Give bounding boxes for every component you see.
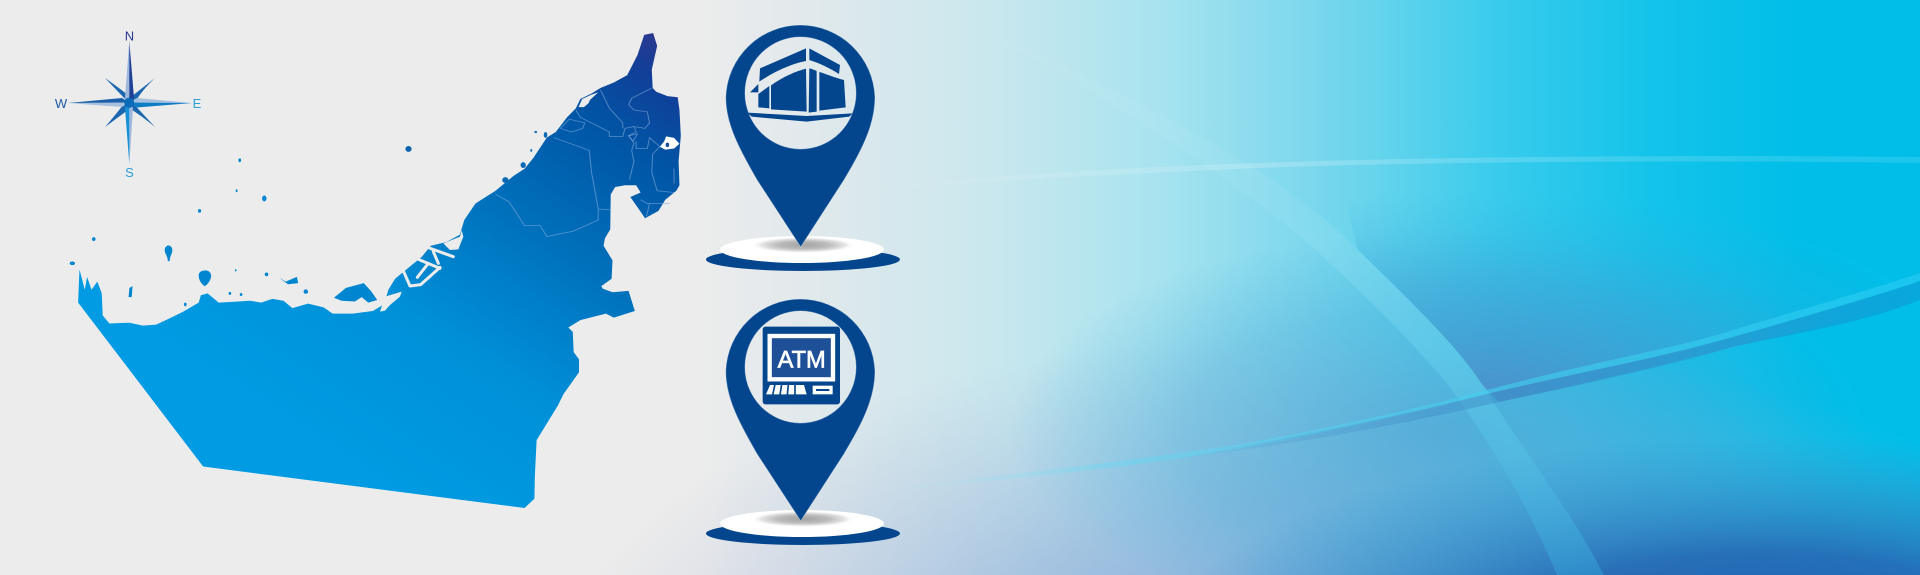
- location pin: bank branch: [706, 25, 900, 271]
- compass diagonal points: [105, 78, 155, 127]
- compass rose: [55, 28, 202, 180]
- enclave inner dot: [666, 143, 669, 147]
- islands: [70, 131, 547, 306]
- icon: bank building: [747, 48, 853, 122]
- pin base: [706, 510, 900, 545]
- coastal lagoons and barrier islands: [380, 223, 463, 312]
- mainland shape: [78, 33, 681, 508]
- emirate borders: [496, 88, 674, 237]
- swoosh: rising dark band: [1180, 281, 1920, 458]
- swoosh: descending arc: [964, 22, 1604, 575]
- compass north-south needle: [125, 41, 134, 164]
- compass east-west needle: [68, 98, 192, 108]
- compass east label: E: [193, 96, 202, 111]
- compass south label: S: [125, 165, 134, 180]
- keypad: [766, 385, 807, 394]
- Fujairah enclave: [660, 136, 679, 150]
- swoosh: horizontal light band: [843, 156, 1920, 192]
- background light effects: [560, 22, 1920, 575]
- map of the UAE: [70, 33, 681, 508]
- location pin: ATM: [706, 299, 900, 545]
- compass centre: [124, 98, 134, 108]
- Ras Al Khaimah inlet: [579, 92, 598, 107]
- pin body: [726, 299, 875, 521]
- icon: ATM machine: [763, 327, 840, 404]
- dark zone above crossing band: [1340, 180, 1920, 402]
- card slot: [813, 386, 833, 394]
- pin body: [726, 25, 875, 247]
- ATM label: ATM: [778, 348, 826, 374]
- pin base: [706, 236, 900, 271]
- compass north label: N: [125, 28, 134, 44]
- swoosh: rising light band: [860, 273, 1920, 492]
- compass west label: W: [55, 96, 68, 111]
